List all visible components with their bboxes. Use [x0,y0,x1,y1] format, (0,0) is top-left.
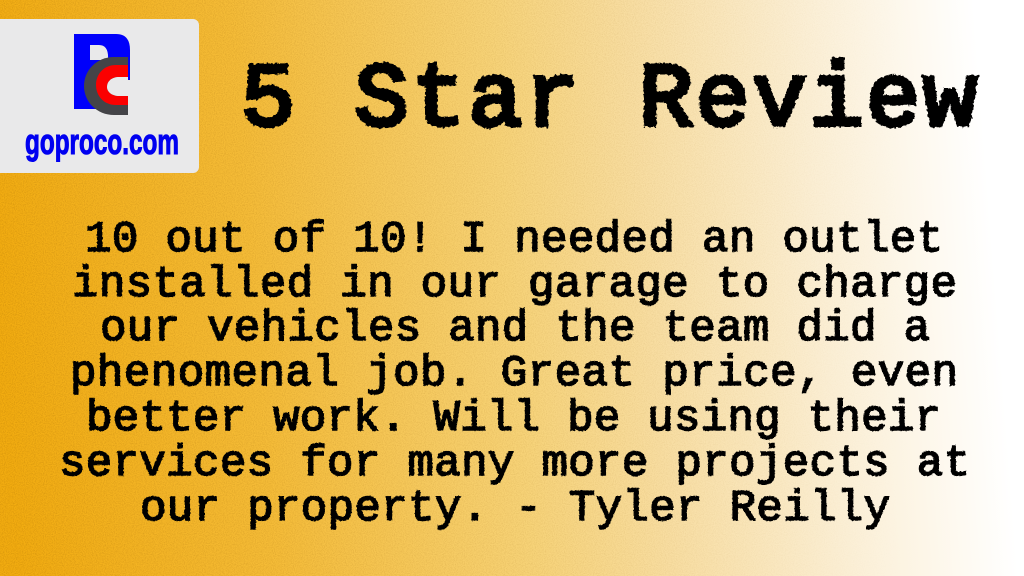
text block: review quote: better work. Will be using their [86,394,941,444]
text block: review quote: services for many more projects at [59,439,970,489]
text block: review quote: installed in our garage to charge [72,260,957,310]
text block: review quote [59,215,970,534]
logo text: website address: goproco.com [25,121,179,162]
icon: PC logo [74,34,130,115]
text block: review quote: phenomenal job. Great price, even [70,349,958,399]
text block: review quote: our vehicles and the team did a [100,304,930,354]
background grain texture [0,0,808,576]
panel: logo card [0,19,199,173]
text block: review quote: 10 out of 10! I needed an outlet [85,215,943,265]
text block: review quote: our property. - Tyler Reilly [140,484,890,534]
title: 5 Star Review [241,51,977,153]
